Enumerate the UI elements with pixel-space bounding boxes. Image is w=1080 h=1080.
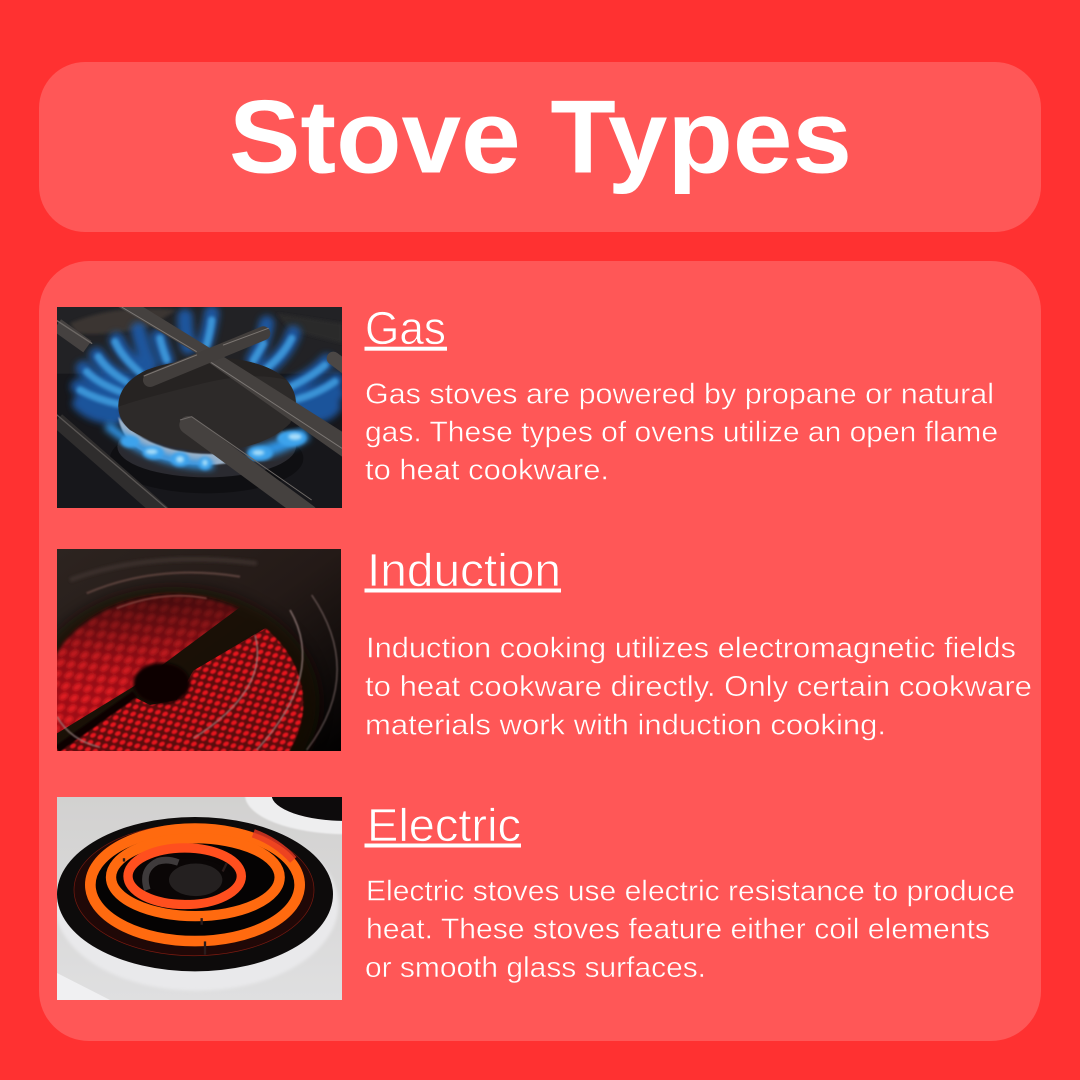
description: electric: Electric stoves use electric resistance to produce (366, 876, 1015, 908)
description: induction: materials work with induction cooking. (365, 710, 886, 742)
heading: electric: Electric (367, 799, 521, 851)
description: induction (365, 632, 1032, 742)
photo: induction cooktop (57, 549, 341, 751)
text: induction (364, 544, 1032, 742)
text: gas (364, 302, 998, 486)
burner base (110, 423, 303, 493)
title: Stove Types (229, 80, 852, 196)
photo: gas burner (57, 307, 342, 508)
description: gas: gas. These types of ovens utilize an open flame (365, 416, 998, 448)
grates (57, 321, 347, 513)
description: induction: Induction cooking utilizes electromagnetic fields (366, 632, 1016, 664)
panel: stove types (27, 261, 1041, 1041)
description: gas (365, 378, 998, 486)
description: electric: or smooth glass surfaces. (365, 952, 706, 984)
heading: gas: Gas (365, 302, 446, 354)
description: electric (365, 876, 1015, 984)
photo: electric coil (57, 797, 342, 1000)
description: induction: to heat cookware directly. Only certain cookware (365, 671, 1032, 703)
heading: induction: Induction (367, 544, 561, 596)
burner cap (118, 358, 296, 452)
description: electric: heat. These stoves feature either coil elements (366, 914, 990, 946)
title banner (39, 62, 1041, 232)
description: gas: to heat cookware. (365, 454, 609, 486)
text: electric (364, 799, 1015, 984)
description: gas: Gas stoves are powered by propane or natural (365, 378, 994, 410)
